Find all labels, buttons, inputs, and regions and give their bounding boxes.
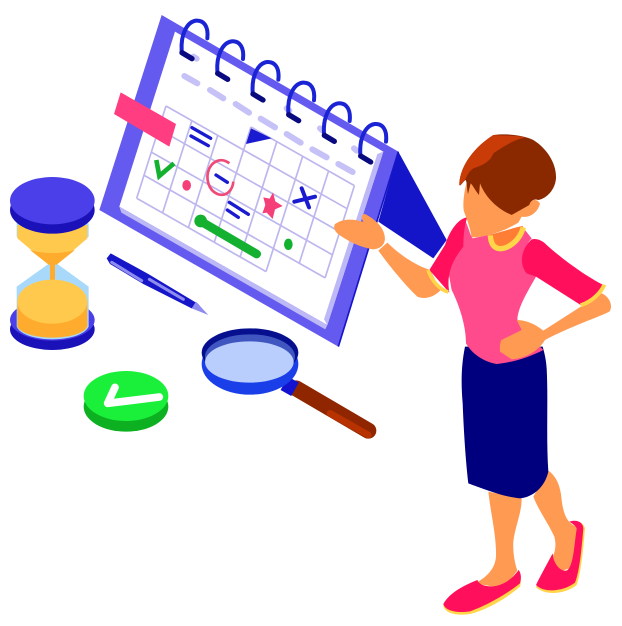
back shoe xyxy=(536,521,585,593)
pen highlights xyxy=(112,262,183,299)
front shoe xyxy=(443,570,521,615)
hole dashes xyxy=(184,57,357,172)
pink circled date xyxy=(207,160,233,195)
left arm xyxy=(378,243,441,298)
hair highlight xyxy=(459,135,525,185)
right sleeve xyxy=(522,239,603,305)
lower sand xyxy=(17,302,87,338)
pen body xyxy=(107,253,203,310)
hourglass xyxy=(10,177,95,350)
left sleeve xyxy=(429,217,467,293)
left cuff xyxy=(428,270,448,292)
second equals mark xyxy=(227,202,248,217)
magnifying glass xyxy=(202,328,368,435)
upper sand xyxy=(17,225,87,265)
green progress bar xyxy=(201,222,257,254)
calendar back stand xyxy=(378,152,447,258)
button face xyxy=(84,371,168,421)
green check button xyxy=(84,371,168,432)
left hand xyxy=(334,214,385,249)
blue cross xyxy=(294,188,315,207)
pink dot xyxy=(182,180,191,191)
legs and skirt xyxy=(443,347,585,615)
face xyxy=(463,180,540,237)
skirt xyxy=(462,347,548,498)
calendar page xyxy=(119,32,383,325)
back leg xyxy=(533,471,577,572)
pen tip xyxy=(192,302,208,315)
woman xyxy=(334,134,611,615)
hourglass top cap xyxy=(10,186,95,234)
front leg xyxy=(475,492,522,588)
desk calendar xyxy=(99,15,447,347)
green dot xyxy=(284,239,293,250)
right cuff xyxy=(581,285,604,305)
hair xyxy=(459,134,556,215)
green check xyxy=(156,160,174,176)
collar xyxy=(490,227,523,249)
right arm and hand xyxy=(500,293,611,359)
flag mark xyxy=(246,128,272,144)
minus mark xyxy=(216,175,227,182)
magnifier handle xyxy=(296,388,368,431)
calendar frame xyxy=(99,15,398,347)
pink tab xyxy=(114,92,176,147)
calendar grid xyxy=(137,83,354,301)
pink star xyxy=(262,192,283,219)
pen xyxy=(107,253,208,315)
upper body xyxy=(334,134,611,364)
neck xyxy=(488,226,524,249)
button side xyxy=(84,382,168,432)
equals mark xyxy=(191,128,211,146)
sand stream xyxy=(50,264,55,281)
hourglass base xyxy=(10,309,95,350)
check mark xyxy=(108,387,159,403)
hourglass glass xyxy=(17,223,89,339)
magnifier collar xyxy=(284,383,295,389)
magnifier rim xyxy=(202,333,298,395)
magnifier lens xyxy=(205,341,294,383)
shirt xyxy=(445,220,543,364)
binding rings xyxy=(182,21,386,162)
